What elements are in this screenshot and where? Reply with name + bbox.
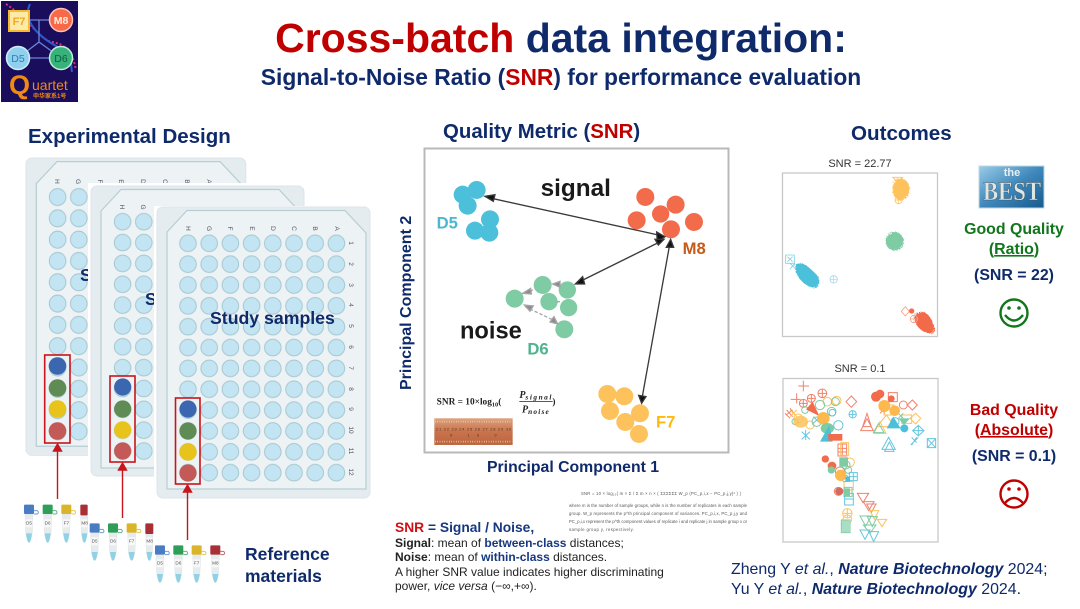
references [731, 561, 1048, 598]
plate 3: 8 [347, 387, 354, 391]
quality metric panel [424, 148, 728, 452]
scatter plot: bad quality [783, 378, 938, 542]
reference material tubes: D6 [175, 561, 182, 566]
markers: red [785, 381, 917, 513]
cluster: F7 good [893, 177, 909, 204]
cluster: D6 [506, 276, 577, 338]
plate 3: 11 [347, 448, 354, 455]
subtitle: Signal-to-Noise Ratio (SNR) for performance evaluation [261, 64, 861, 90]
plate 1 column letters: B [183, 179, 190, 184]
cluster: D6 good [886, 233, 903, 250]
plate 1 column letters: C [161, 179, 168, 184]
formula: P [519, 390, 525, 401]
small formula note: sample group y, respectively. [569, 527, 634, 532]
plate 1 [26, 158, 246, 455]
cluster: F7 [598, 385, 649, 443]
reference material tubes: D5 [92, 539, 98, 544]
reference material tubes: F7 [64, 521, 69, 526]
logo: Quartet: D5 [11, 53, 25, 65]
plate 2 column letters: H [118, 205, 125, 210]
plate 1 reference wells [45, 355, 70, 443]
icon: the BEST [979, 166, 1044, 208]
label: SNR = 22.77: SNR = 22.77 [828, 158, 892, 170]
label: signal: signal [541, 175, 611, 202]
plate 1 label: Study samples [80, 265, 205, 285]
plate 1 column letters: D [139, 179, 146, 184]
reference material tubes: D6 [110, 539, 116, 544]
cluster: M8 [628, 188, 703, 238]
small formula note: where m is the number of sample groups, while n is the number of replicates in each sample [569, 503, 748, 508]
plate 3: 6 [347, 345, 354, 349]
plate 1 column letters: E [117, 179, 124, 184]
plate 3: E [248, 226, 255, 231]
arrow: plate 1 [54, 444, 62, 499]
formula [437, 390, 555, 416]
label: SNR = 0.1: SNR = 0.1 [834, 363, 886, 375]
markers: orange [790, 396, 921, 527]
formula: SNR = 10×log [437, 397, 492, 407]
heading: Quality Metric (SNR): Quality Metric (SNR) [443, 121, 640, 143]
small formula note: PC_p,i,x represent the p^th component values of replicate i and replicate j in sample group x or [569, 519, 748, 524]
logo: Quartet: D6 [54, 53, 68, 65]
plate 2 reference wells [110, 376, 135, 462]
reference material tubes: F7 [129, 539, 135, 544]
plate 3: G [205, 226, 212, 231]
definition text block: SNR = Signal / Noise, [395, 520, 534, 535]
heading: Outcomes: Outcomes [851, 122, 952, 145]
logo: Quartet: F7 [13, 16, 25, 28]
arrow: plate 3 [184, 485, 192, 540]
label: M8: M8 [683, 239, 706, 258]
plate 2 column letters: G [139, 204, 146, 210]
outcome text: good quality: (SNR = 22) [974, 267, 1054, 284]
arrows: signal [485, 195, 674, 403]
title: Cross-batch data integration: [275, 15, 847, 61]
plate 3: D [269, 226, 276, 231]
filled markers [793, 390, 910, 532]
outcome text: good quality [964, 221, 1064, 284]
formula: 10 [492, 401, 498, 408]
definition text block: power, vice versa (−∞,+∞). [395, 579, 537, 593]
logo: Quartet: 中华家系1号 [33, 92, 66, 100]
reference material tubes: D6 [45, 521, 51, 526]
markers: blue [802, 409, 936, 542]
plate 1 column letters [53, 179, 212, 184]
markers: teal green [792, 398, 903, 533]
plate 3: 3 [347, 283, 354, 287]
plate 3: 10 [347, 426, 354, 434]
reference material tubes: M8 [146, 539, 153, 544]
plate 1 column letters: H [53, 179, 60, 184]
plate 1 column letters: G [74, 179, 81, 184]
cluster: D5 good [786, 255, 837, 286]
formula: ( [498, 396, 501, 407]
plate 1 column letters: A [205, 179, 212, 184]
icon: ruler [434, 418, 513, 445]
plate 3: 7 [347, 366, 354, 370]
plate 2 column letters [118, 204, 146, 210]
outcome text: good quality: (Ratio) [989, 241, 1039, 258]
cluster: D5 [454, 181, 499, 242]
reference material tubes: F7 [194, 561, 200, 566]
small formula note: SNR = 10 × log₁₀( m × Σ / Σ m × n × ( ΣΣΣΣΣΣ W_p (PC_p,i,x − PC_p,j,y)² ) ) [581, 491, 742, 496]
formula: signal [524, 393, 552, 402]
outcome text: bad quality: Bad Quality [970, 402, 1058, 419]
plate 2 label: Study samples [145, 289, 270, 309]
plate 2 [88, 183, 304, 477]
logo: Quartet: uartet [32, 77, 68, 93]
reference material tubes: M8 [212, 561, 219, 566]
reference material tubes [24, 505, 225, 583]
label: D5: D5 [437, 213, 458, 232]
plate 3: 9 [347, 407, 354, 411]
heading: Experimental Design: Experimental Design [28, 125, 231, 148]
axis label: Principal Component 1: Principal Component 1 [487, 459, 659, 476]
formula: ) [552, 396, 555, 407]
icon: the BEST: the [1004, 167, 1020, 179]
plate 3 label: Study samples [210, 308, 335, 328]
plate 3: F [226, 227, 233, 231]
plate 3: H [184, 226, 191, 231]
definition text block: A higher SNR value indicates higher discriminating [395, 565, 664, 579]
plate 3: B [311, 226, 318, 231]
reference material tubes: D5 [26, 521, 32, 526]
reference material tubes: D5 [157, 561, 163, 566]
label: Reference materials: Reference [245, 544, 330, 564]
plate 3 reference wells [176, 398, 200, 484]
arrows: noise [523, 281, 560, 324]
plate 3: C [290, 226, 297, 231]
definition text block [395, 520, 664, 593]
definition text block: Noise: mean of within-class distances. [395, 550, 607, 564]
icon: the BEST: BEST [983, 177, 1041, 206]
title [261, 15, 861, 90]
label: F7: F7 [656, 413, 675, 432]
logo: Quartet [1, 1, 78, 102]
label: Reference materials: materials [245, 566, 322, 586]
plate 3: A [333, 226, 340, 231]
label: Reference materials [245, 544, 330, 586]
plate 3 [154, 206, 370, 499]
plate 3: 4 [347, 303, 354, 307]
cluster: M8 good [901, 307, 933, 332]
axis label: Principal Component 2: Principal Component 2 [398, 216, 415, 390]
icon: frowning face [1000, 480, 1028, 508]
plate 3: 12 [347, 468, 354, 476]
arrow: plate 2 [118, 463, 126, 518]
outcome text: good quality: Good Quality [964, 221, 1064, 238]
label: noise: noise [460, 318, 522, 344]
icon: smiley [1000, 300, 1028, 326]
logo: Quartet: Q [9, 70, 30, 100]
definition text block: Signal: mean of between-class distances; [395, 536, 624, 550]
logo: Quartet: M8 [54, 15, 68, 27]
outcome text: bad quality [970, 402, 1058, 465]
scatter plot: good quality [782, 173, 938, 336]
outcome text: bad quality: (Absolute) [975, 422, 1053, 439]
reference material tubes: M8 [81, 521, 88, 526]
icon: ruler: 21 22 23 24 25 26 27 28 29 30 [436, 427, 512, 432]
formula: P [522, 404, 528, 415]
references: Yu Y et al., Nature Biotechnology 2024. [731, 581, 1021, 598]
references: Zheng Y et al., Nature Biotechnology 2024; [731, 561, 1048, 578]
outcome text: bad quality: (SNR = 0.1) [972, 448, 1056, 465]
plate 3: 1 [347, 241, 354, 245]
label: D6: D6 [527, 339, 549, 358]
formula: noise [528, 407, 549, 416]
plate 3: 2 [347, 262, 354, 266]
small formula note: group. W_p represents the p^th principal component of variances. PC_p,i,x, PC_p,j,y and [569, 511, 748, 516]
plate 3: 5 [347, 324, 354, 328]
icon: ruler: 9 10 9 [450, 433, 497, 438]
plate 1 column letters: F [96, 180, 103, 184]
small formula note [569, 491, 748, 532]
